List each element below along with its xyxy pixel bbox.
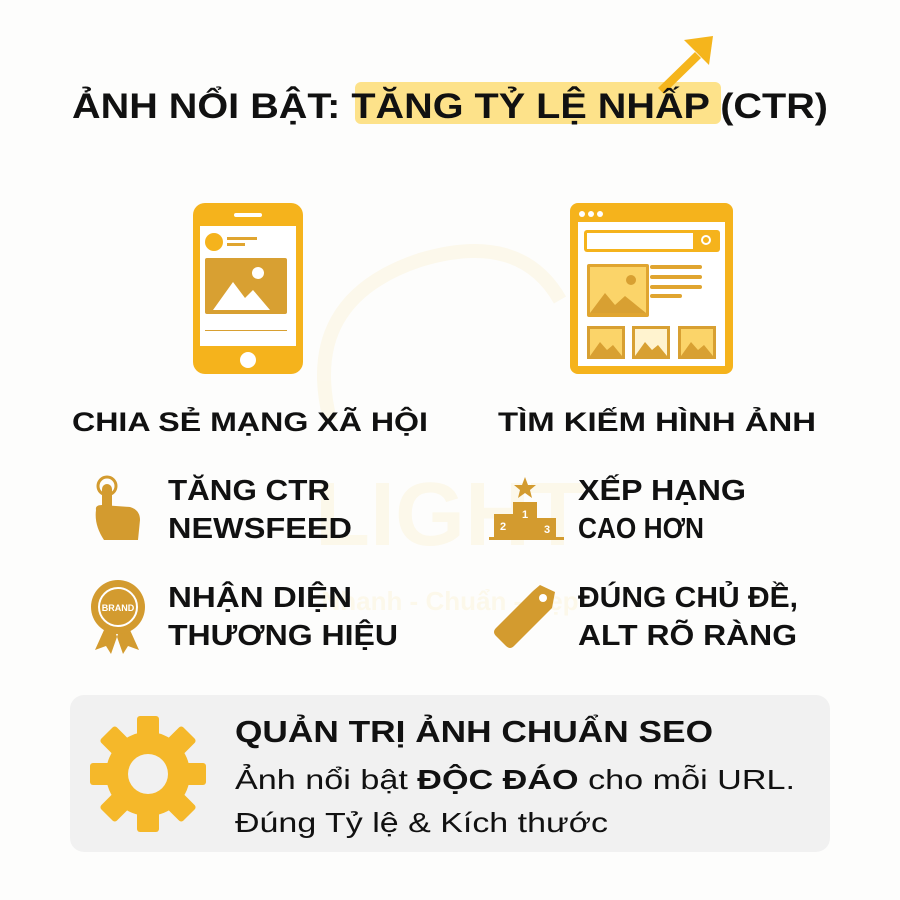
label: image search: TÌM KIẾM HÌNH ẢNH [498, 405, 816, 437]
icon: podium: 2 [500, 521, 506, 533]
text: tang ctr: NEWSFEED [168, 513, 352, 545]
icon: hand [96, 477, 140, 540]
icon: trend arrow [658, 36, 713, 94]
title: ẢNH NỔI BẬT: TĂNG TỶ LỆ NHẤP (CTR) [72, 86, 828, 126]
title [72, 36, 828, 126]
icon: podium [489, 477, 564, 540]
text: seo body: Ảnh nổi bật ĐỘC ĐÁO cho mỗi URL. [235, 763, 795, 795]
panel: SEO [70, 695, 830, 852]
label: social: CHIA SẺ MẠNG XÃ HỘI [72, 405, 428, 437]
icon: podium: 3 [544, 524, 550, 536]
text: dung chu de [578, 580, 798, 652]
text: dung chu de: ĐÚNG CHỦ ĐỀ, [578, 580, 798, 614]
title highlight [355, 82, 721, 124]
icon: tag [494, 585, 555, 648]
text: seo body [235, 763, 795, 838]
text: xep hang [578, 473, 746, 545]
text: dung chu de: ALT RÕ RÀNG [578, 618, 797, 652]
icon: brand badge [91, 580, 145, 654]
text: nhan dien: NHẬN DIỆN [168, 580, 352, 614]
icon: browser [570, 203, 733, 374]
text: xep hang: XẾP HẠNG [578, 473, 746, 507]
watermark: Nhanh - Chuẩn - Đẹp [321, 586, 579, 616]
watermark: LIGHT [315, 465, 585, 565]
text: tang ctr: TĂNG CTR [168, 474, 330, 507]
watermark [315, 251, 585, 616]
icon: gear [90, 716, 206, 832]
text: tang ctr [168, 474, 352, 545]
text: xep hang: CAO HƠN [578, 513, 704, 545]
icon: podium: 1 [522, 509, 528, 521]
icon: brand badge: BRAND [102, 603, 135, 613]
text: nhan dien [168, 580, 398, 652]
text: nhan dien: THƯƠNG HIỆU [168, 618, 398, 652]
icon: phone [193, 203, 303, 374]
text: seo heading: QUẢN TRỊ ẢNH CHUẨN SEO [235, 714, 713, 749]
text: seo body: Đúng Tỷ lệ & Kích thước [235, 807, 608, 838]
